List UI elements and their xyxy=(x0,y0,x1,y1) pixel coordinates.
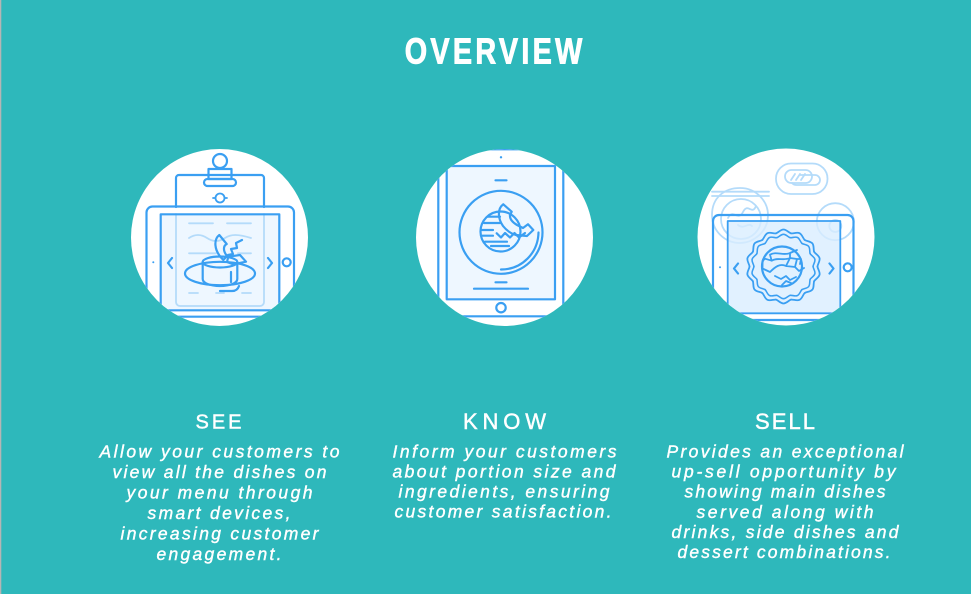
description: Provides an exceptional xyxy=(666,442,905,462)
heading: SELL xyxy=(755,409,815,434)
heading: SEE xyxy=(196,412,242,434)
panel: see xyxy=(98,148,340,564)
description: showing main dishes xyxy=(684,482,886,502)
description: served along with xyxy=(696,502,874,522)
panel: sell xyxy=(666,148,905,562)
description: drinks, side dishes and xyxy=(672,522,900,542)
description: engagement. xyxy=(156,544,282,564)
description: view all the dishes on xyxy=(112,462,326,482)
icon: tablet with badge and side dishes xyxy=(697,148,875,340)
description xyxy=(98,442,340,564)
description: ingredients, ensuring xyxy=(398,482,610,502)
icon: tablet showing a dish on a clipboard menu xyxy=(130,148,308,336)
description: up-sell opportunity by xyxy=(672,462,897,482)
panel: know xyxy=(392,148,617,522)
description: your menu through xyxy=(126,482,312,502)
icon: tablet with dish in a circle xyxy=(416,148,594,326)
title: OVERVIEW xyxy=(405,30,583,71)
description xyxy=(666,442,905,562)
heading: KNOW xyxy=(463,409,546,434)
description: Inform your customers xyxy=(392,442,617,462)
description: about portion size and xyxy=(392,462,617,482)
description xyxy=(392,442,617,522)
description: increasing customer xyxy=(120,524,320,544)
description: Allow your customers to xyxy=(98,442,340,462)
description: customer satisfaction. xyxy=(394,502,612,522)
description: dessert combinations. xyxy=(678,542,890,562)
description: smart devices, xyxy=(148,503,290,523)
